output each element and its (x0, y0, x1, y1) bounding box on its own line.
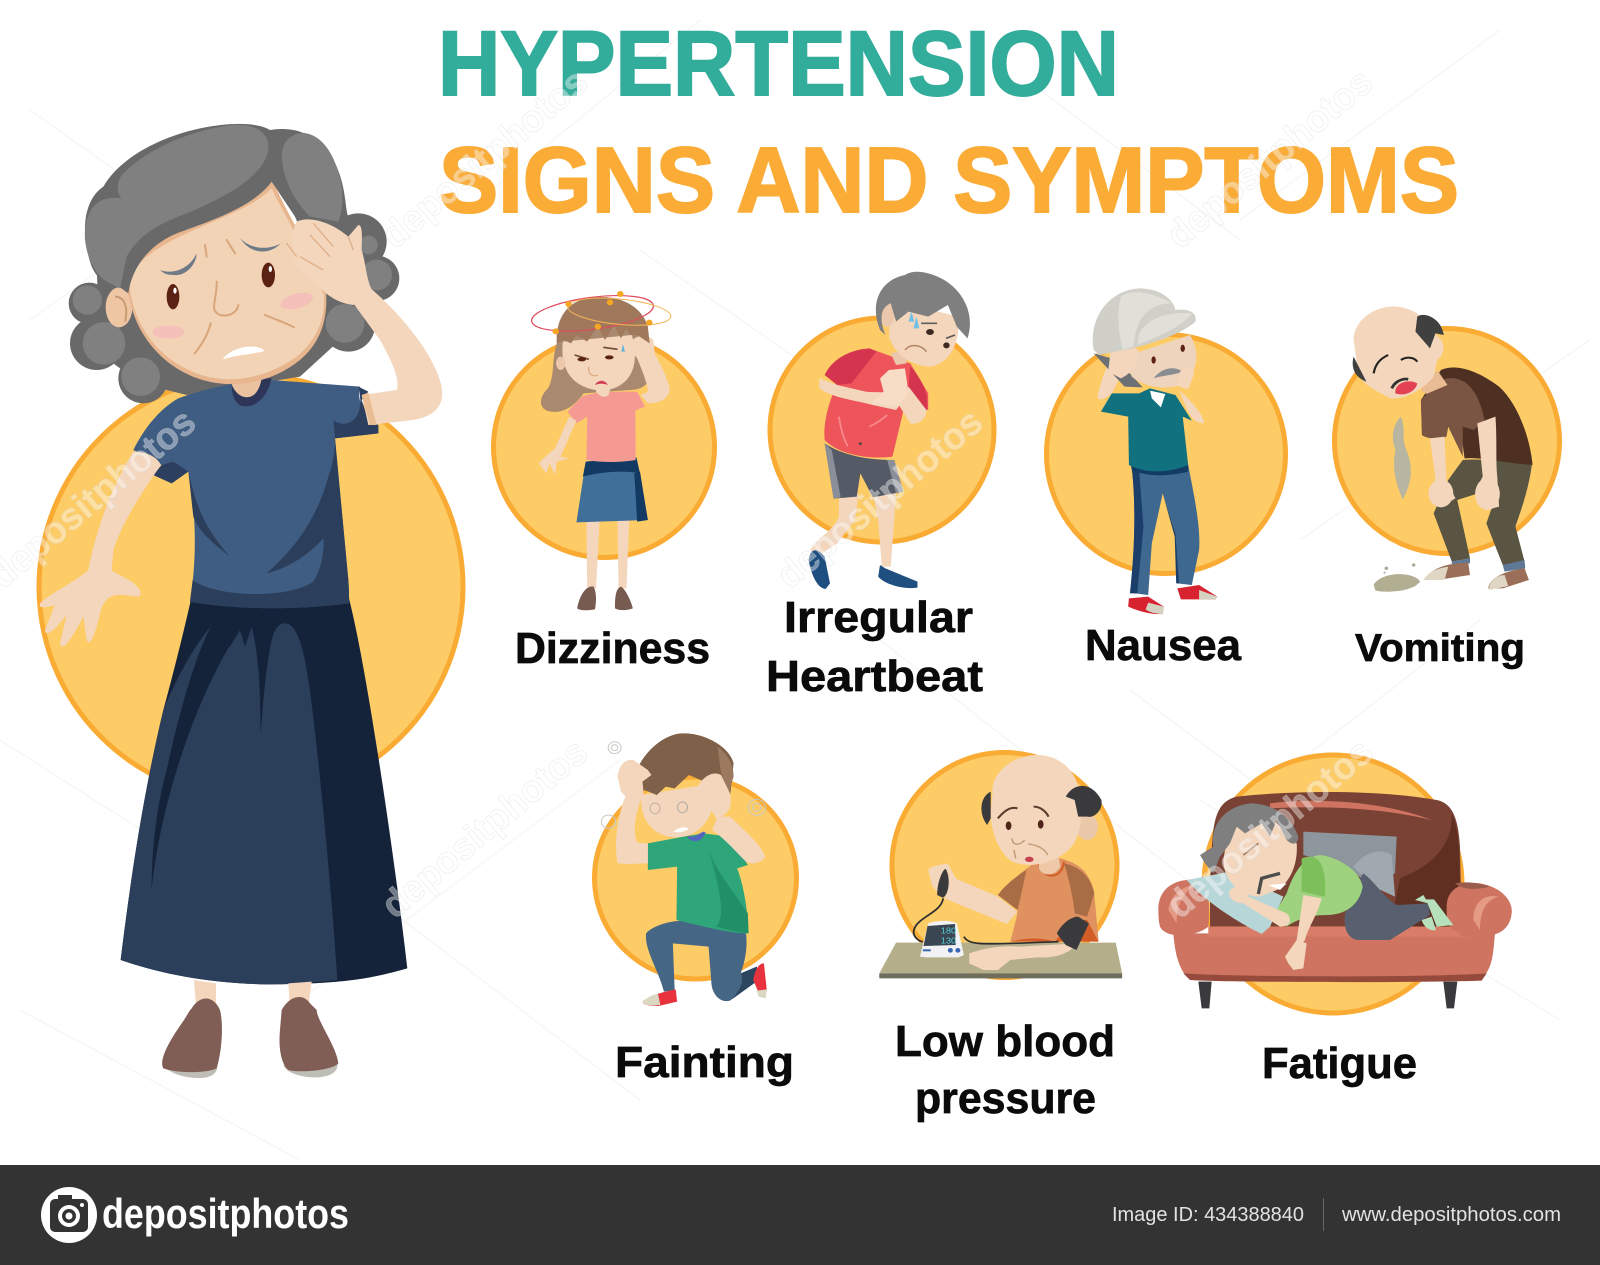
shirt (133, 380, 378, 608)
illustration: dizzy girl with stars (529, 290, 672, 610)
nausea circle (1046, 334, 1286, 574)
infographic canvas: depositphotos (769, 401, 991, 597)
label: irregular heartbeat: Irregular (784, 593, 973, 642)
title line: hypertension: HYPERTENSION (438, 13, 1119, 115)
label: low blood pressure: Low blood (895, 1017, 1115, 1066)
label: vomiting: Vomiting (1355, 627, 1525, 670)
low blood pressure circle (892, 752, 1117, 978)
hair top (85, 124, 348, 293)
illustration: kneeling boy holding head (601, 733, 767, 1006)
panel: fatigue (1158, 755, 1512, 1088)
title line: signs and symptoms: SIGNS AND SYMPTOMS (439, 128, 1459, 232)
label: low blood pressure (895, 1017, 1115, 1123)
hand on forehead (292, 219, 373, 305)
panel: main character, elderly woman holding her forehead (39, 124, 463, 1078)
image id: Image ID: 434388840 (1112, 1204, 1304, 1226)
fatigue circle (1204, 755, 1462, 1013)
footer logo icon: camera (41, 1187, 97, 1243)
label: irregular heartbeat (766, 593, 983, 701)
infographic canvas: depositphotos (374, 731, 596, 927)
title (438, 13, 1459, 232)
head (106, 287, 132, 327)
illustration: man measuring blood pressure (879, 755, 1122, 978)
illustration: bald man vomiting (1353, 307, 1533, 592)
label: dizziness: Dizziness (515, 624, 710, 673)
infographic canvas: depositphotos (1159, 731, 1381, 927)
label: fatigue: Fatigue (1262, 1039, 1417, 1088)
face details (160, 238, 281, 275)
illustration: man clutching chest (809, 272, 970, 589)
label: low blood pressure: pressure (915, 1074, 1096, 1123)
arms (40, 452, 161, 646)
dizziness circle (494, 336, 714, 558)
footer logo wordmark: depositphotos (102, 1190, 349, 1237)
panel: low blood pressure (879, 752, 1122, 1123)
heartbeat circle (770, 318, 994, 542)
panel: fainting (594, 733, 796, 1087)
fainting circle (594, 777, 796, 979)
panel: dizziness (494, 290, 714, 673)
panel: vomiting (1334, 307, 1560, 670)
illustration: man with cap covering mouth (1093, 288, 1217, 614)
label: nausea: Nausea (1085, 621, 1242, 670)
illustration: elderly woman (40, 124, 442, 1078)
panel: irregular heartbeat (766, 272, 994, 701)
footer bar (0, 1165, 1600, 1265)
label: fainting: Fainting (615, 1038, 794, 1087)
illustration: man measuring blood pressure: 130 (941, 936, 956, 945)
main yellow circle (39, 375, 463, 799)
label: irregular heartbeat: Heartbeat (766, 652, 983, 701)
infographic canvas: depositphotos (374, 61, 596, 257)
vomiting circle (1334, 328, 1560, 554)
hair back curls (69, 213, 399, 403)
illustration: man measuring blood pressure: 180 (941, 926, 956, 935)
infographic canvas: depositphotos (1159, 61, 1381, 257)
panel: nausea (1046, 288, 1286, 670)
illustration: man asleep on sofa (1158, 792, 1512, 1008)
website url: www.depositphotos.com (1341, 1204, 1561, 1226)
